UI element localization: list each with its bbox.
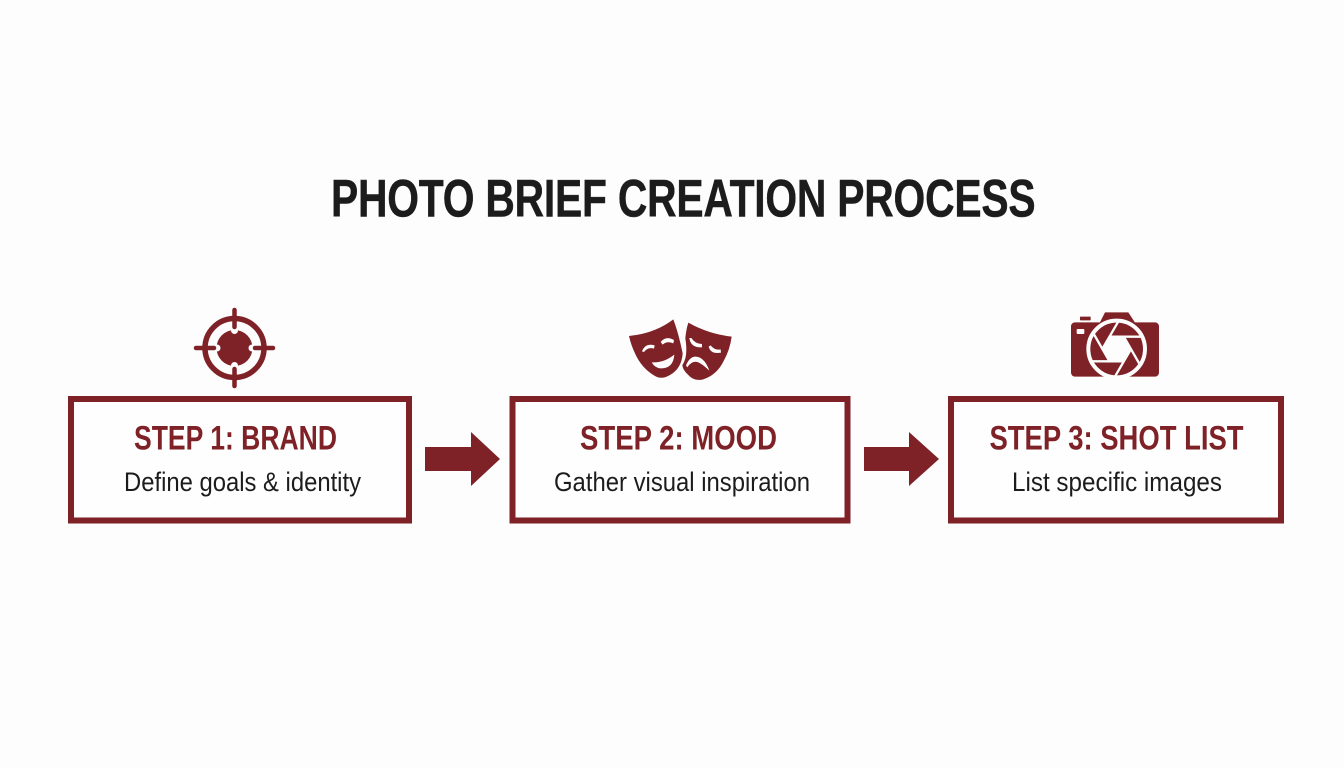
step 3 description: List specific images [1012, 467, 1222, 497]
right mask [682, 323, 732, 380]
step 2 description: Gather visual inspiration [554, 467, 810, 497]
icon: camera [1071, 312, 1159, 377]
icon: target [196, 310, 273, 386]
panel: step 1 [71, 399, 409, 520]
right mask face [686, 338, 721, 371]
panel: step 2 [512, 399, 848, 520]
icon: theatre masks [629, 319, 732, 380]
arrow: step 2 to step 3 [864, 432, 939, 486]
panel: step 3 [951, 399, 1281, 520]
aperture blades [1102, 337, 1131, 361]
left mask [629, 319, 683, 378]
step 1 description: Define goals & identity [124, 467, 361, 497]
step 1 heading: STEP 1: BRAND [134, 420, 337, 458]
arrow: step 1 to step 2 [425, 432, 500, 486]
step 2 heading: STEP 2: MOOD [580, 420, 777, 458]
title: PHOTO BRIEF CREATION PROCESS [331, 169, 1036, 229]
step 3 heading: STEP 3: SHOT LIST [990, 420, 1244, 458]
left mask face [642, 338, 674, 368]
